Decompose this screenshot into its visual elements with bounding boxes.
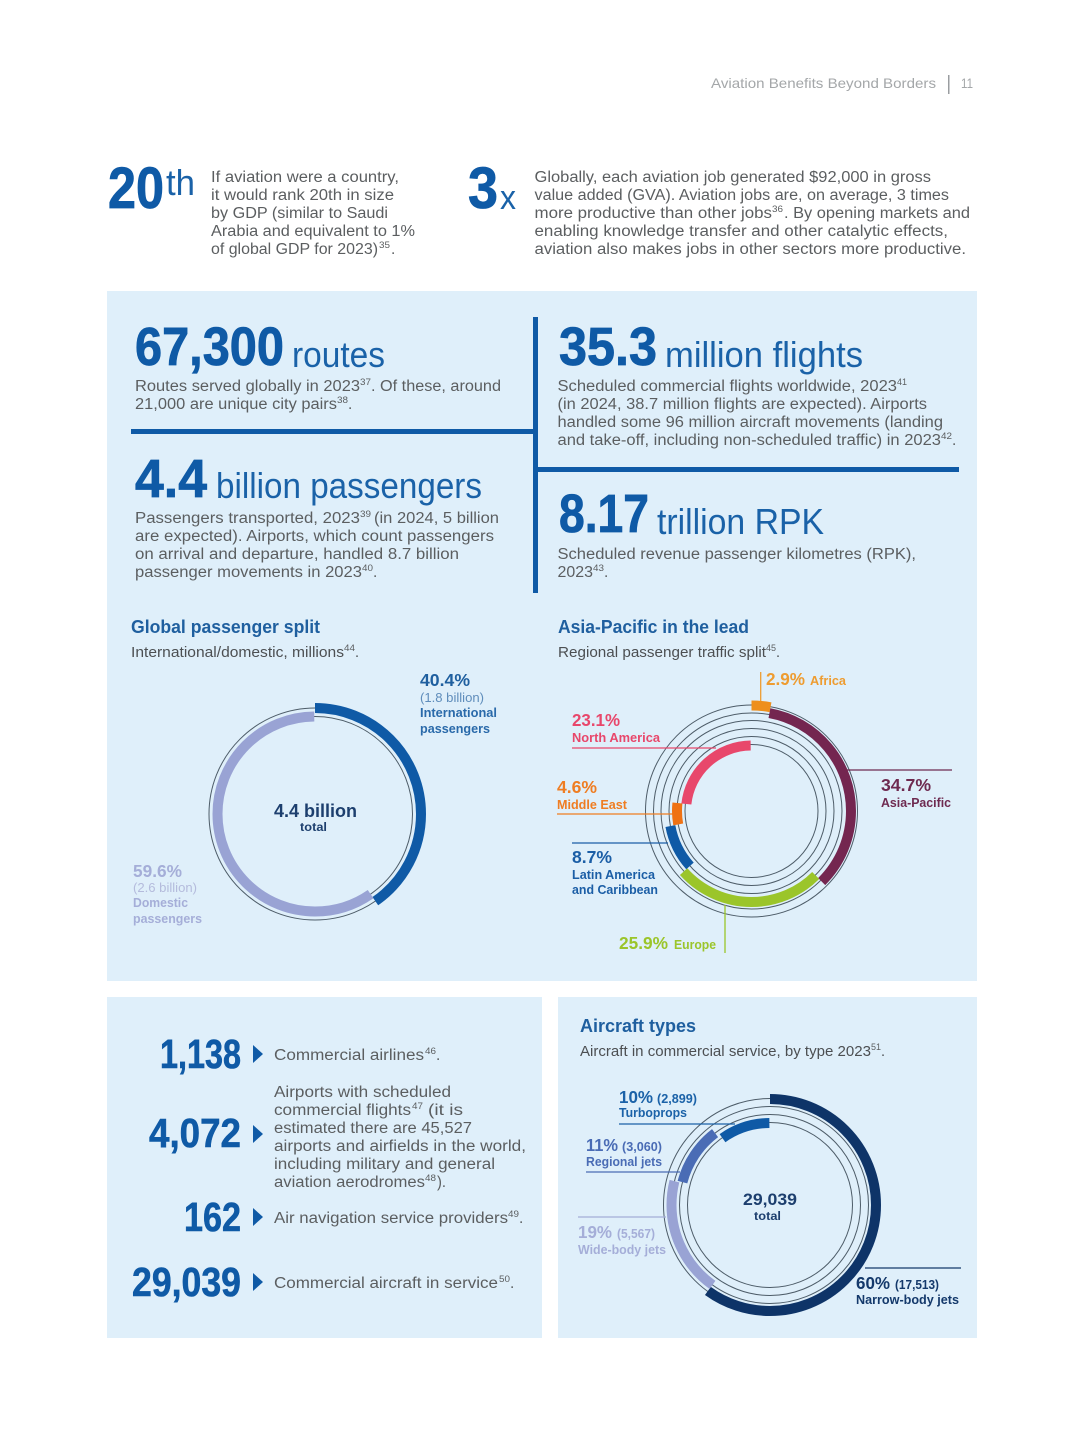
- label: Africa: [766, 669, 847, 689]
- stat: RPK: .: [604, 564, 608, 581]
- stat: RPK: [558, 484, 916, 581]
- stat: 20th GDP rank: by GDP (similar to Saudi: [211, 205, 388, 222]
- label: Latin America and Caribbean: Latin America: [572, 868, 656, 882]
- stat: RPK: 8.17: [559, 484, 649, 544]
- stat row: aircraft in service: 50: [499, 1274, 510, 1284]
- panel: aircraft types: [558, 997, 977, 1338]
- stat: passengers: Passengers transported, 2023: [135, 510, 360, 527]
- label: Europe: 25.9%: [619, 933, 668, 953]
- label: domestic passengers: (2.6 billion): [133, 881, 197, 895]
- heading: Asia-Pacific in the lead: Asia-Pacific in the lead: [558, 617, 749, 637]
- stat: 3x productivity: value added (GVA). Aviation jobs are, on average, 3 times: [534, 187, 949, 204]
- label: Middle East: [557, 777, 628, 812]
- stat: flights: [558, 317, 956, 449]
- heading: aircraft types: Aircraft types: [580, 1016, 696, 1036]
- stat: routes: routes: [292, 334, 385, 375]
- ring chart: aircraft by type: [578, 1098, 961, 1312]
- stat row: airports: Airports with scheduled: [274, 1084, 451, 1101]
- stat: passengers: passenger movements in 2023: [135, 564, 362, 581]
- stat: RPK: 2023: [558, 564, 593, 581]
- stat row: airlines: 1,138: [160, 1031, 241, 1077]
- donut chart: international vs domestic: total: [300, 820, 327, 834]
- heading: Asia-Pacific in the lead: 45: [766, 643, 776, 653]
- ring chart: aircraft by type: 29,039: [743, 1190, 797, 1209]
- donut chart: international vs domestic: [209, 708, 421, 920]
- label: domestic passengers: [133, 861, 202, 926]
- stat: 20th GDP rank: If aviation were a country,: [211, 169, 399, 186]
- stat: RPK: trillion RPK: [657, 501, 824, 542]
- label: international passengers: International: [420, 706, 497, 720]
- stat: 3x productivity: x: [500, 179, 516, 217]
- page header: 11: [961, 75, 973, 91]
- label: international passengers: (1.8 billion): [420, 691, 484, 705]
- label: international passengers: [420, 670, 497, 736]
- label: turboprops: Turboprops: [619, 1106, 687, 1120]
- stat: passengers: are expected). Airports, which count passengers: [135, 528, 494, 545]
- heading: global passenger split: 44: [344, 643, 355, 653]
- stat: flights: Scheduled commercial flights worldwide, 2023: [558, 378, 897, 395]
- stat: 20th GDP rank: .: [391, 241, 395, 258]
- stat: passengers: billion passengers: [216, 465, 482, 506]
- stat: passengers: [135, 449, 499, 581]
- label: turboprops: 10%: [619, 1087, 653, 1107]
- stat row: airports: airports and airfields in the world,: [274, 1138, 526, 1155]
- label: wide-body jets: 19%: [578, 1222, 612, 1242]
- label: wide-body jets: Wide-body jets: [578, 1243, 666, 1257]
- label: North America: 23.1%: [572, 710, 620, 730]
- stat: 3x productivity: enabling knowledge transfer and other catalytic effects,: [534, 223, 948, 240]
- stat: 3x productivity: Globally, each aviation job generated $92,000 in gross: [534, 169, 931, 186]
- ring chart: aircraft by type: total: [754, 1209, 781, 1223]
- label: Europe: Europe: [674, 938, 716, 952]
- heading: aircraft types: .: [881, 1044, 885, 1060]
- stat: routes: . Of these, around: [371, 378, 501, 395]
- label: Asia-Pacific: 34.7%: [881, 775, 931, 795]
- stat row: airports: 47: [412, 1101, 423, 1111]
- stat row: aircraft in service: .: [510, 1275, 514, 1292]
- label: Africa: Africa: [810, 674, 847, 688]
- page header: Aviation Benefits Beyond Borders: [711, 75, 936, 91]
- stat row: air navigation providers: 162: [184, 1194, 241, 1240]
- label: Middle East: Middle East: [557, 798, 628, 812]
- label: Asia-Pacific: Asia-Pacific: [881, 796, 951, 810]
- heading: global passenger split: [131, 617, 359, 661]
- label: North America: North America: [572, 731, 661, 745]
- label: Latin America and Caribbean: 8.7%: [572, 847, 612, 867]
- label: narrow-body jets: Narrow-body jets: [856, 1293, 959, 1307]
- stat: flights: (in 2024, 38.7 million flights are expected). Airports: [558, 396, 927, 413]
- heading: Asia-Pacific in the lead: [558, 617, 780, 661]
- stat: RPK: 43: [593, 563, 604, 573]
- stat row: air navigation providers: .: [519, 1210, 523, 1227]
- stat: flights: handled some 96 million aircraft movements (landing: [558, 414, 943, 431]
- stat row: air navigation providers: 49: [508, 1209, 519, 1219]
- stat: passengers: .: [373, 564, 377, 581]
- stat: routes: .: [348, 396, 352, 413]
- ring chart: regional traffic split: [557, 672, 952, 953]
- stat: 20th GDP rank: 35: [379, 240, 390, 250]
- donut chart: international vs domestic: 4.4 billion: [274, 801, 357, 821]
- heading: global passenger split: Global passenger split: [131, 617, 320, 637]
- label: Latin America and Caribbean: [572, 847, 658, 897]
- label: Middle East: 4.6%: [557, 777, 597, 797]
- stat row: air navigation providers: Air navigation service providers: [274, 1210, 508, 1227]
- stat row: airports: commercial flights: [274, 1102, 411, 1119]
- label: narrow-body jets: [856, 1273, 959, 1307]
- page header: [711, 75, 973, 94]
- stat: passengers: (in 2024, 5 billion: [374, 510, 499, 527]
- label: domestic passengers: passengers: [133, 912, 202, 926]
- stat: routes: 67,300: [135, 317, 284, 377]
- label: turboprops: [619, 1087, 697, 1120]
- divider lines: [131, 317, 959, 593]
- heading: aircraft types: Aircraft in commercial service, by type 2023: [580, 1044, 871, 1060]
- stat row: aircraft in service: Commercial aircraft in service: [274, 1275, 498, 1292]
- label: North America: [572, 710, 661, 745]
- stat: flights: .: [952, 432, 956, 449]
- label: regional jets: (3,060): [622, 1140, 662, 1154]
- stat row: aircraft in service: 29,039: [132, 1259, 241, 1305]
- stat: passengers: 39: [360, 509, 371, 519]
- stat: 3x productivity: 36: [772, 204, 783, 214]
- label: wide-body jets: (5,567): [617, 1227, 655, 1241]
- label: narrow-body jets: (17,513): [895, 1278, 939, 1292]
- stat: RPK: Scheduled revenue passenger kilometres (RPK),: [558, 546, 916, 563]
- stat: 3x productivity: aviation also makes jobs in other sectors more productive.: [534, 241, 966, 258]
- label: domestic passengers: Domestic: [133, 896, 188, 910]
- heading: Asia-Pacific in the lead: Regional passenger traffic split: [558, 645, 766, 661]
- stat: 20th GDP rank: of global GDP for 2023): [211, 241, 378, 258]
- heading: Asia-Pacific in the lead: .: [776, 645, 780, 661]
- label: turboprops: (2,899): [657, 1092, 697, 1106]
- stat: passengers: 4.4: [135, 449, 207, 509]
- stat: 20th GDP rank: Arabia and equivalent to 1%: [211, 223, 415, 240]
- stat: 3x productivity: more productive than other jobs: [534, 205, 772, 222]
- panel: global headline figures and charts: [107, 291, 977, 981]
- stat: flights: million flights: [665, 334, 863, 375]
- label: international passengers: 40.4%: [420, 670, 470, 690]
- stat: 20th GDP rank: 20: [108, 156, 164, 221]
- label: regional jets: [586, 1135, 662, 1169]
- stat: 3x productivity: . By opening markets and: [784, 205, 970, 222]
- stat: 3x productivity: [468, 156, 970, 258]
- panel: aviation system counts: [107, 997, 542, 1338]
- stat row: airports: (it is: [428, 1102, 463, 1119]
- stat: 3x productivity: 3: [468, 156, 498, 221]
- stat: routes: 37: [360, 377, 371, 387]
- stat row: airlines: 46: [425, 1046, 436, 1056]
- stat: 20th GDP rank: th: [166, 162, 195, 203]
- stat row: airports: [149, 1084, 526, 1191]
- label: Latin America and Caribbean: and Caribbean: [572, 883, 658, 897]
- label: domestic passengers: 59.6%: [133, 861, 182, 881]
- heading: aircraft types: 51: [871, 1042, 881, 1052]
- stat: 20th GDP rank: [108, 156, 415, 258]
- stat row: airports: ).: [437, 1174, 446, 1191]
- label: Africa: 2.9%: [766, 669, 805, 689]
- stat: flights: 42: [941, 431, 952, 441]
- stat row: airports: 4,072: [149, 1110, 241, 1156]
- stat: routes: [135, 317, 501, 413]
- stat: flights: 41: [897, 377, 907, 387]
- stat: 20th GDP rank: it would rank 20th in size: [211, 187, 394, 204]
- label: international passengers: passengers: [420, 722, 490, 736]
- stat: passengers: on arrival and departure, handled 8.7 billion: [135, 546, 459, 563]
- label: Asia-Pacific: [881, 775, 951, 810]
- heading: global passenger split: International/domestic, millions: [131, 645, 344, 661]
- stat row: airports: 48: [425, 1173, 436, 1183]
- label: regional jets: 11%: [586, 1135, 618, 1155]
- stat row: aircraft in service: [132, 1259, 514, 1305]
- heading: global passenger split: .: [355, 645, 359, 661]
- stat row: airports: estimated there are 45,527: [274, 1120, 472, 1137]
- label: narrow-body jets: 60%: [856, 1273, 890, 1293]
- stat: passengers: 40: [362, 563, 373, 573]
- stat: routes: Routes served globally in 2023: [135, 378, 360, 395]
- stat row: airlines: .: [436, 1047, 440, 1064]
- stat: flights: 35.3: [559, 317, 657, 377]
- stat: flights: and take-off, including non-scheduled traffic) in 2023: [558, 432, 941, 449]
- stat: routes: 21,000 are unique city pairs: [135, 396, 337, 413]
- stat row: airports: including military and general: [274, 1156, 495, 1173]
- label: Europe: [619, 933, 716, 953]
- stat row: air navigation providers: [184, 1194, 523, 1240]
- stat row: airlines: Commercial airlines: [274, 1047, 424, 1064]
- heading: aircraft types: [580, 1016, 885, 1060]
- label: regional jets: Regional jets: [586, 1155, 662, 1169]
- label: wide-body jets: [578, 1222, 666, 1257]
- stat row: airlines: [160, 1031, 440, 1077]
- stat: routes: 38: [337, 395, 348, 405]
- stat row: airports: aviation aerodromes: [274, 1174, 425, 1191]
